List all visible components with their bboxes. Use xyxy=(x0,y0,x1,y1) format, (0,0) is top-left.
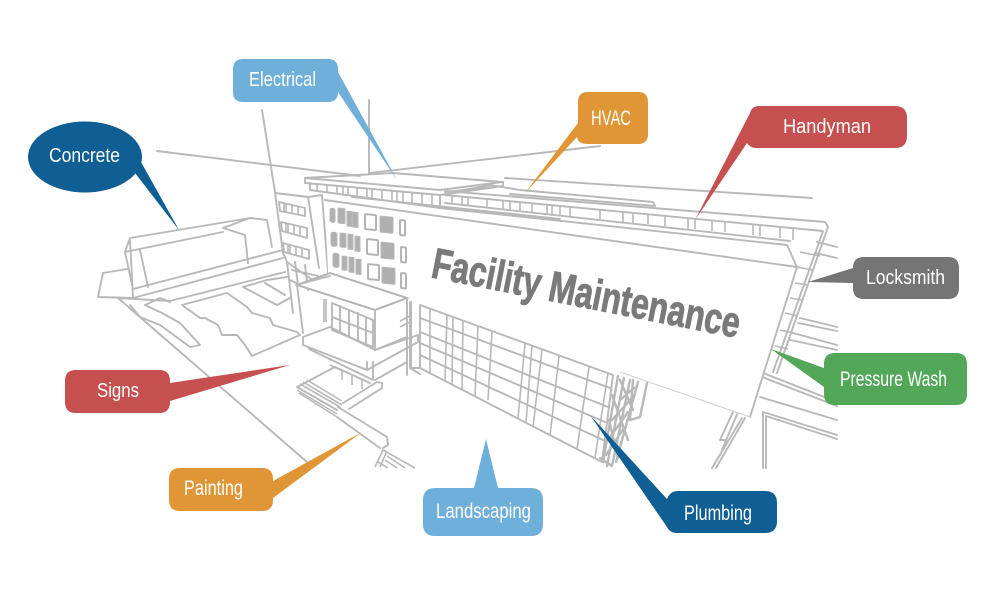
callout: Landscaping: Landscaping xyxy=(436,500,531,523)
roof xyxy=(305,173,503,208)
left tower xyxy=(275,193,328,313)
callout: Landscaping xyxy=(423,439,543,536)
callout: Locksmith: Locksmith xyxy=(866,267,945,289)
curtain wall xyxy=(400,302,613,462)
stairs and ramp xyxy=(297,367,415,468)
main windows xyxy=(330,208,406,289)
callout: Plumbing: Plumbing xyxy=(684,502,752,525)
callout: Electrical: Electrical xyxy=(249,69,316,91)
callout: HVAC xyxy=(525,92,648,193)
sign panel outline xyxy=(325,200,797,417)
callout: Plumbing xyxy=(590,415,777,533)
callout: Concrete: Concrete xyxy=(49,145,120,167)
sign lower edge xyxy=(620,372,750,417)
lattice wall xyxy=(600,376,647,466)
callout: Signs xyxy=(65,365,290,413)
callout: Pressure Wash xyxy=(771,349,967,405)
title: Facility Maintenance: Facility Maintenance xyxy=(428,240,744,348)
front block xyxy=(297,273,420,389)
low left building xyxy=(98,218,307,462)
callout: Locksmith xyxy=(808,257,959,299)
callout: Electrical xyxy=(233,59,397,180)
callout: Signs: Signs xyxy=(97,380,139,402)
callout: Concrete xyxy=(28,122,179,230)
sign panel xyxy=(325,200,797,417)
callout: Handyman xyxy=(695,106,907,220)
right side lines xyxy=(712,242,837,468)
callout: Painting xyxy=(169,432,362,511)
long parapet xyxy=(352,185,828,373)
callout: Handyman: Handyman xyxy=(783,116,871,138)
callout: HVAC: HVAC xyxy=(591,107,631,130)
callout: Painting: Painting xyxy=(184,477,243,500)
building line drawing xyxy=(98,100,837,468)
callout: Pressure Wash: Pressure Wash xyxy=(840,368,947,391)
